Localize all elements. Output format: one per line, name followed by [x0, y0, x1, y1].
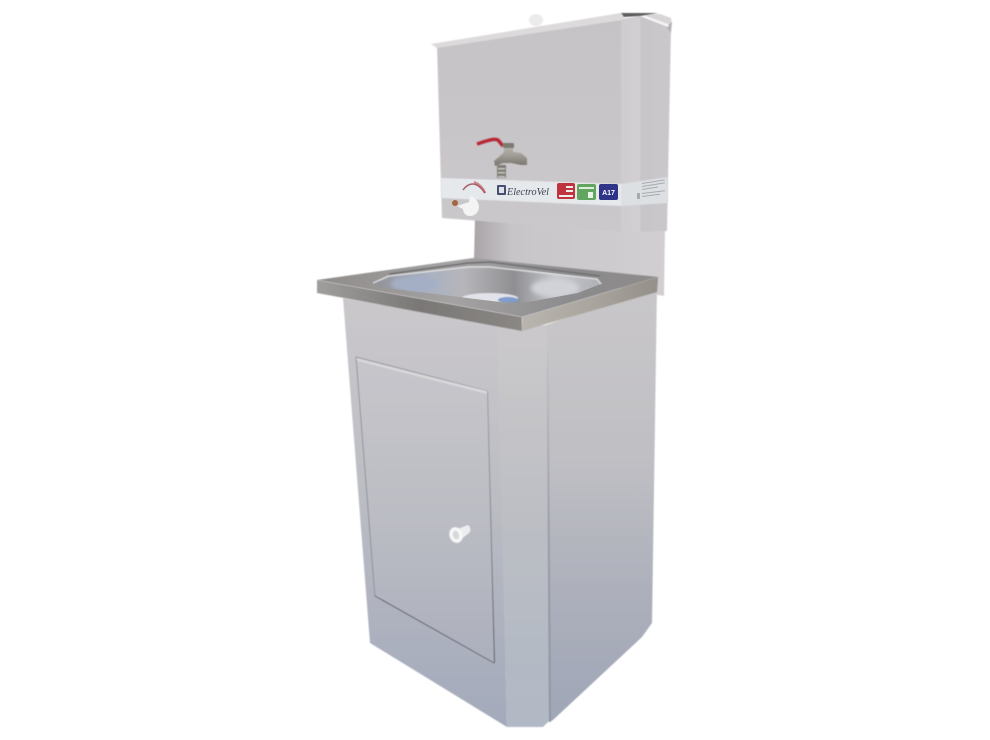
tank front face [437, 19, 622, 232]
sink deck [317, 258, 658, 317]
product illustration: water heater sink unit [316, 12, 672, 728]
blue badge [599, 184, 618, 200]
faucet with red lever [477, 139, 527, 178]
sink front rim [317, 280, 522, 331]
sink right rim [522, 277, 658, 331]
threaded nozzle [497, 165, 506, 178]
indicator lamp [452, 200, 458, 206]
stainless sink [317, 258, 658, 331]
label band [441, 177, 668, 216]
red lever [477, 139, 503, 146]
sink basin [373, 265, 601, 303]
cabinet [343, 285, 657, 727]
door knob [455, 525, 470, 540]
red badge [557, 183, 575, 199]
label band: A17 [602, 190, 615, 197]
basin shading [531, 279, 579, 297]
corner seam [546, 340, 551, 722]
basin back rim [373, 267, 601, 284]
power dial [457, 196, 479, 216]
logo mark [497, 185, 506, 195]
brand name: ElectroVel [506, 187, 549, 198]
lid knob [529, 14, 543, 26]
cabinet door [356, 357, 494, 663]
fine print [637, 179, 665, 199]
tank lid [431, 13, 625, 48]
tank side face [621, 16, 671, 232]
cabinet left face [343, 298, 507, 727]
temperature arc [463, 184, 485, 193]
faucet body [494, 145, 527, 166]
cabinet chamfered corner [497, 325, 550, 727]
water tank [431, 13, 672, 232]
green badge [577, 184, 596, 200]
cabinet right face [546, 285, 657, 722]
backsplash panel [474, 218, 665, 296]
basin reflection [462, 293, 518, 303]
